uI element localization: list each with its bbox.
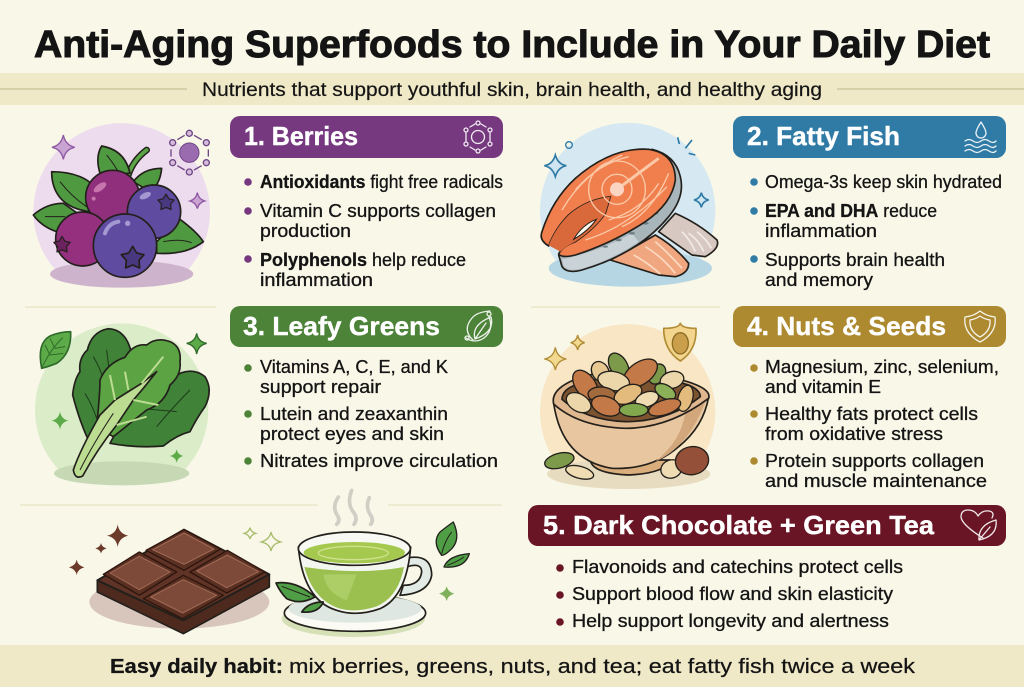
icon: heart with leaf (961, 510, 996, 540)
bullet list: nuts and seeds: Magnesium, zinc, selenium, (765, 357, 999, 377)
panel: dark chocolate and green tea (528, 505, 1006, 631)
icon: molecule (464, 121, 492, 153)
bullet list: fatty fish: inflammation (765, 221, 877, 241)
header: 3. Leafy Greens (230, 306, 503, 347)
bullet list: dark chocolate and green tea: Support blood flow and skin elasticity (572, 584, 893, 604)
panel: fatty fish (540, 116, 1006, 290)
header: 3. Leafy Greens: 3. Leafy Greens (243, 311, 440, 341)
bullet list: nuts and seeds (750, 357, 999, 491)
subtitle band (0, 73, 1024, 105)
bullet list: leafy greens: Lutein and zeaxanthin (260, 404, 448, 424)
bullet list: berries: Polyphenols help reduce (260, 250, 466, 270)
bullet list: dark chocolate and green tea: Flavonoids and catechins protect cells (572, 557, 903, 577)
bullet list: berries: Antioxidants fight free radicals (260, 172, 503, 192)
bullet list: nuts and seeds: and muscle maintenance (765, 471, 987, 491)
bullet list: leafy greens: Vitamins A, C, E, and K (260, 357, 448, 377)
header: 5. Dark Chocolate + Green Tea: 5. Dark Chocolate + Green Tea (543, 510, 935, 540)
bullet list: berries: inflammation (260, 270, 373, 290)
bullet list: nuts and seeds: from oxidative stress (765, 424, 943, 444)
title: Anti-Aging Superfoods to Include in Your Daily Diet (34, 24, 990, 66)
header: 5. Dark Chocolate + Green Tea (528, 505, 1006, 546)
bullet list: dark chocolate and green tea: Help support longevity and alertness (572, 611, 889, 631)
bullet list: nuts and seeds: Healthy fats protect cells (765, 404, 978, 424)
footer band: mix berries, greens, nuts, and tea; eat fatty fish twice a week (289, 655, 916, 678)
bullet list: fatty fish: Supports brain health (765, 250, 945, 270)
bullet list: berries (244, 172, 503, 290)
bullet list: berries: production (260, 221, 351, 241)
bullet list: nuts and seeds: Protein supports collagen (765, 451, 984, 471)
header: 2. Fatty Fish (733, 116, 1006, 158)
bullet list: fatty fish: EPA and DHA reduce (765, 201, 937, 221)
bullet list: leafy greens: protect eyes and skin (260, 424, 444, 444)
panel: leafy greens (35, 306, 503, 485)
header: 1. Berries: 1. Berries (244, 121, 358, 151)
bullet list: fatty fish: and memory (765, 270, 873, 290)
panel: nuts and seeds (540, 306, 1006, 491)
illustration: bowl of nuts (540, 323, 715, 489)
footer band: Easy daily habit: (110, 655, 283, 678)
icon: leaf in ring (465, 311, 492, 341)
header: 2. Fatty Fish: 2. Fatty Fish (747, 121, 900, 151)
subtitle band: Nutrients that support youthful skin, brain health, and healthy aging (202, 79, 822, 101)
header: 1. Berries (230, 116, 503, 158)
bullet list: berries: Vitamin C supports collagen (260, 201, 496, 221)
header: 4. Nuts & Seeds: 4. Nuts & Seeds (747, 311, 946, 341)
illustration: spinach (35, 323, 209, 485)
icon: shield (965, 311, 995, 342)
panel: berries (33, 116, 503, 290)
illustration: salmon (540, 123, 718, 287)
bullet list: leafy greens (244, 357, 498, 471)
footer band (0, 645, 1024, 687)
illustration: chocolate bar and green tea (69, 490, 469, 637)
bullet list: nuts and seeds: and vitamin E (765, 377, 881, 397)
illustration: berries (33, 123, 210, 288)
bullet list: leafy greens: Nitrates improve circulation (260, 451, 498, 471)
bullet list: fatty fish (750, 172, 1002, 290)
bullet list: dark chocolate and green tea (556, 557, 903, 631)
bullet list: fatty fish: Omega-3s keep skin hydrated (765, 172, 1002, 192)
icon: water drop and waves (965, 122, 996, 152)
header: 4. Nuts & Seeds (733, 306, 1006, 347)
bullet list: leafy greens: support repair (260, 377, 381, 397)
